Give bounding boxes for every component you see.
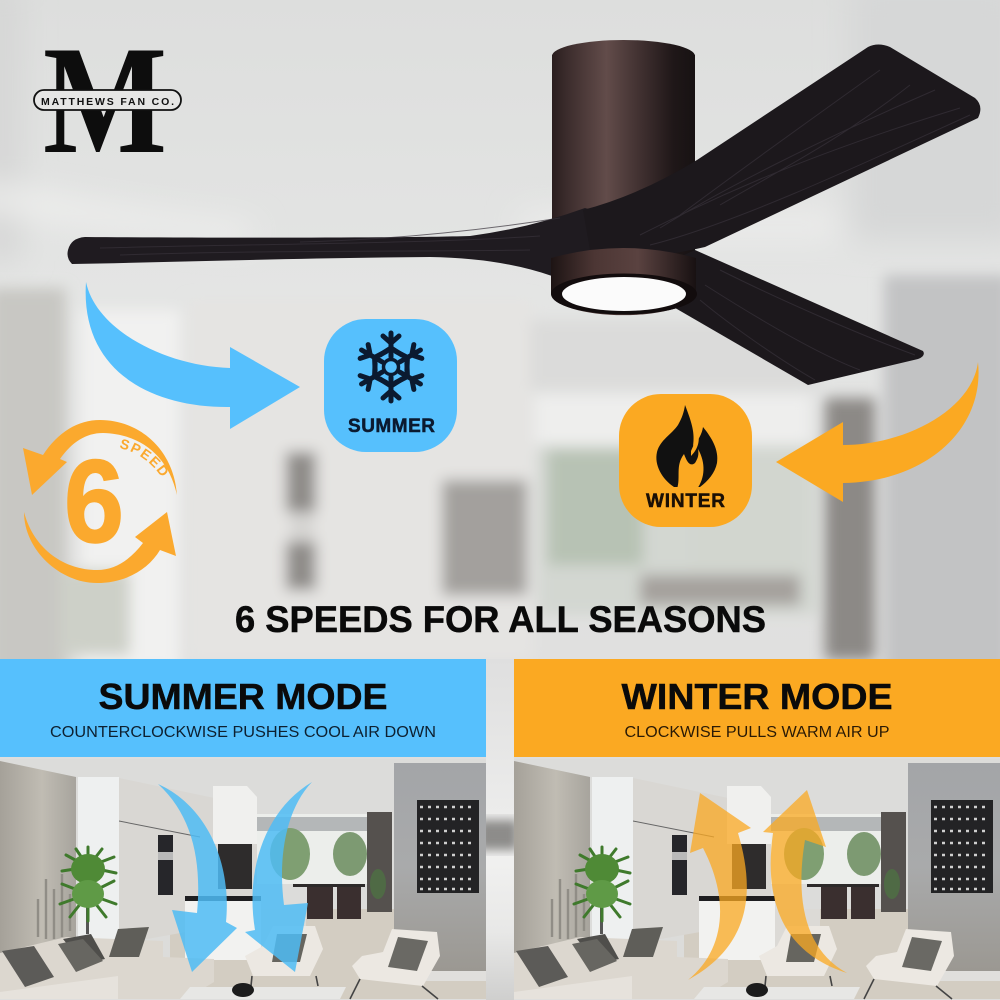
speed arc label: SPEED [120,439,168,476]
label: winter: WINTER [646,491,725,512]
fan blade: left [68,208,640,276]
headline: 6 SPEEDS FOR ALL SEASONS [235,599,766,640]
winter room scene [514,759,1000,999]
ceiling fan [68,40,980,385]
panel: winter mode [514,659,1000,757]
arrow: blue summer airflow [86,282,300,429]
winter description: CLOCKWISE PULLS WARM AIR UP [624,724,890,741]
summer heading: SUMMER MODE [98,676,388,717]
winter icon tile [619,394,752,527]
wood grain [100,70,970,380]
top circular arrow [23,420,177,495]
icon: 6 speed badge [23,420,177,583]
summer airflow arrows [158,782,312,972]
icon: flame [656,405,717,489]
fan blade: upper right [583,44,980,258]
arrow: orange winter airflow [776,362,979,502]
gap between lower panels [478,659,518,1000]
fan blade: lower right [650,250,924,385]
logo: Matthews Fan Co.: M [43,14,167,186]
summer icon tile [324,319,457,452]
fan canopy cylinder [552,40,695,285]
panel: summer mode [0,659,486,757]
bottom circular arrow [24,512,176,583]
label: summer: SUMMER [348,416,435,437]
fan light ring [551,248,697,315]
logo: Matthews Fan Co.: MATTHEWS FAN CO. [41,96,174,108]
winter heading: WINTER MODE [622,676,892,717]
icon: snowflake [356,333,426,401]
summer description: COUNTERCLOCKWISE PUSHES COOL AIR DOWN [50,724,436,741]
numeral 6: 6 [64,436,124,568]
winter airflow arrows [688,790,847,980]
summer room scene [0,759,486,999]
blurred background photo [0,0,1000,678]
